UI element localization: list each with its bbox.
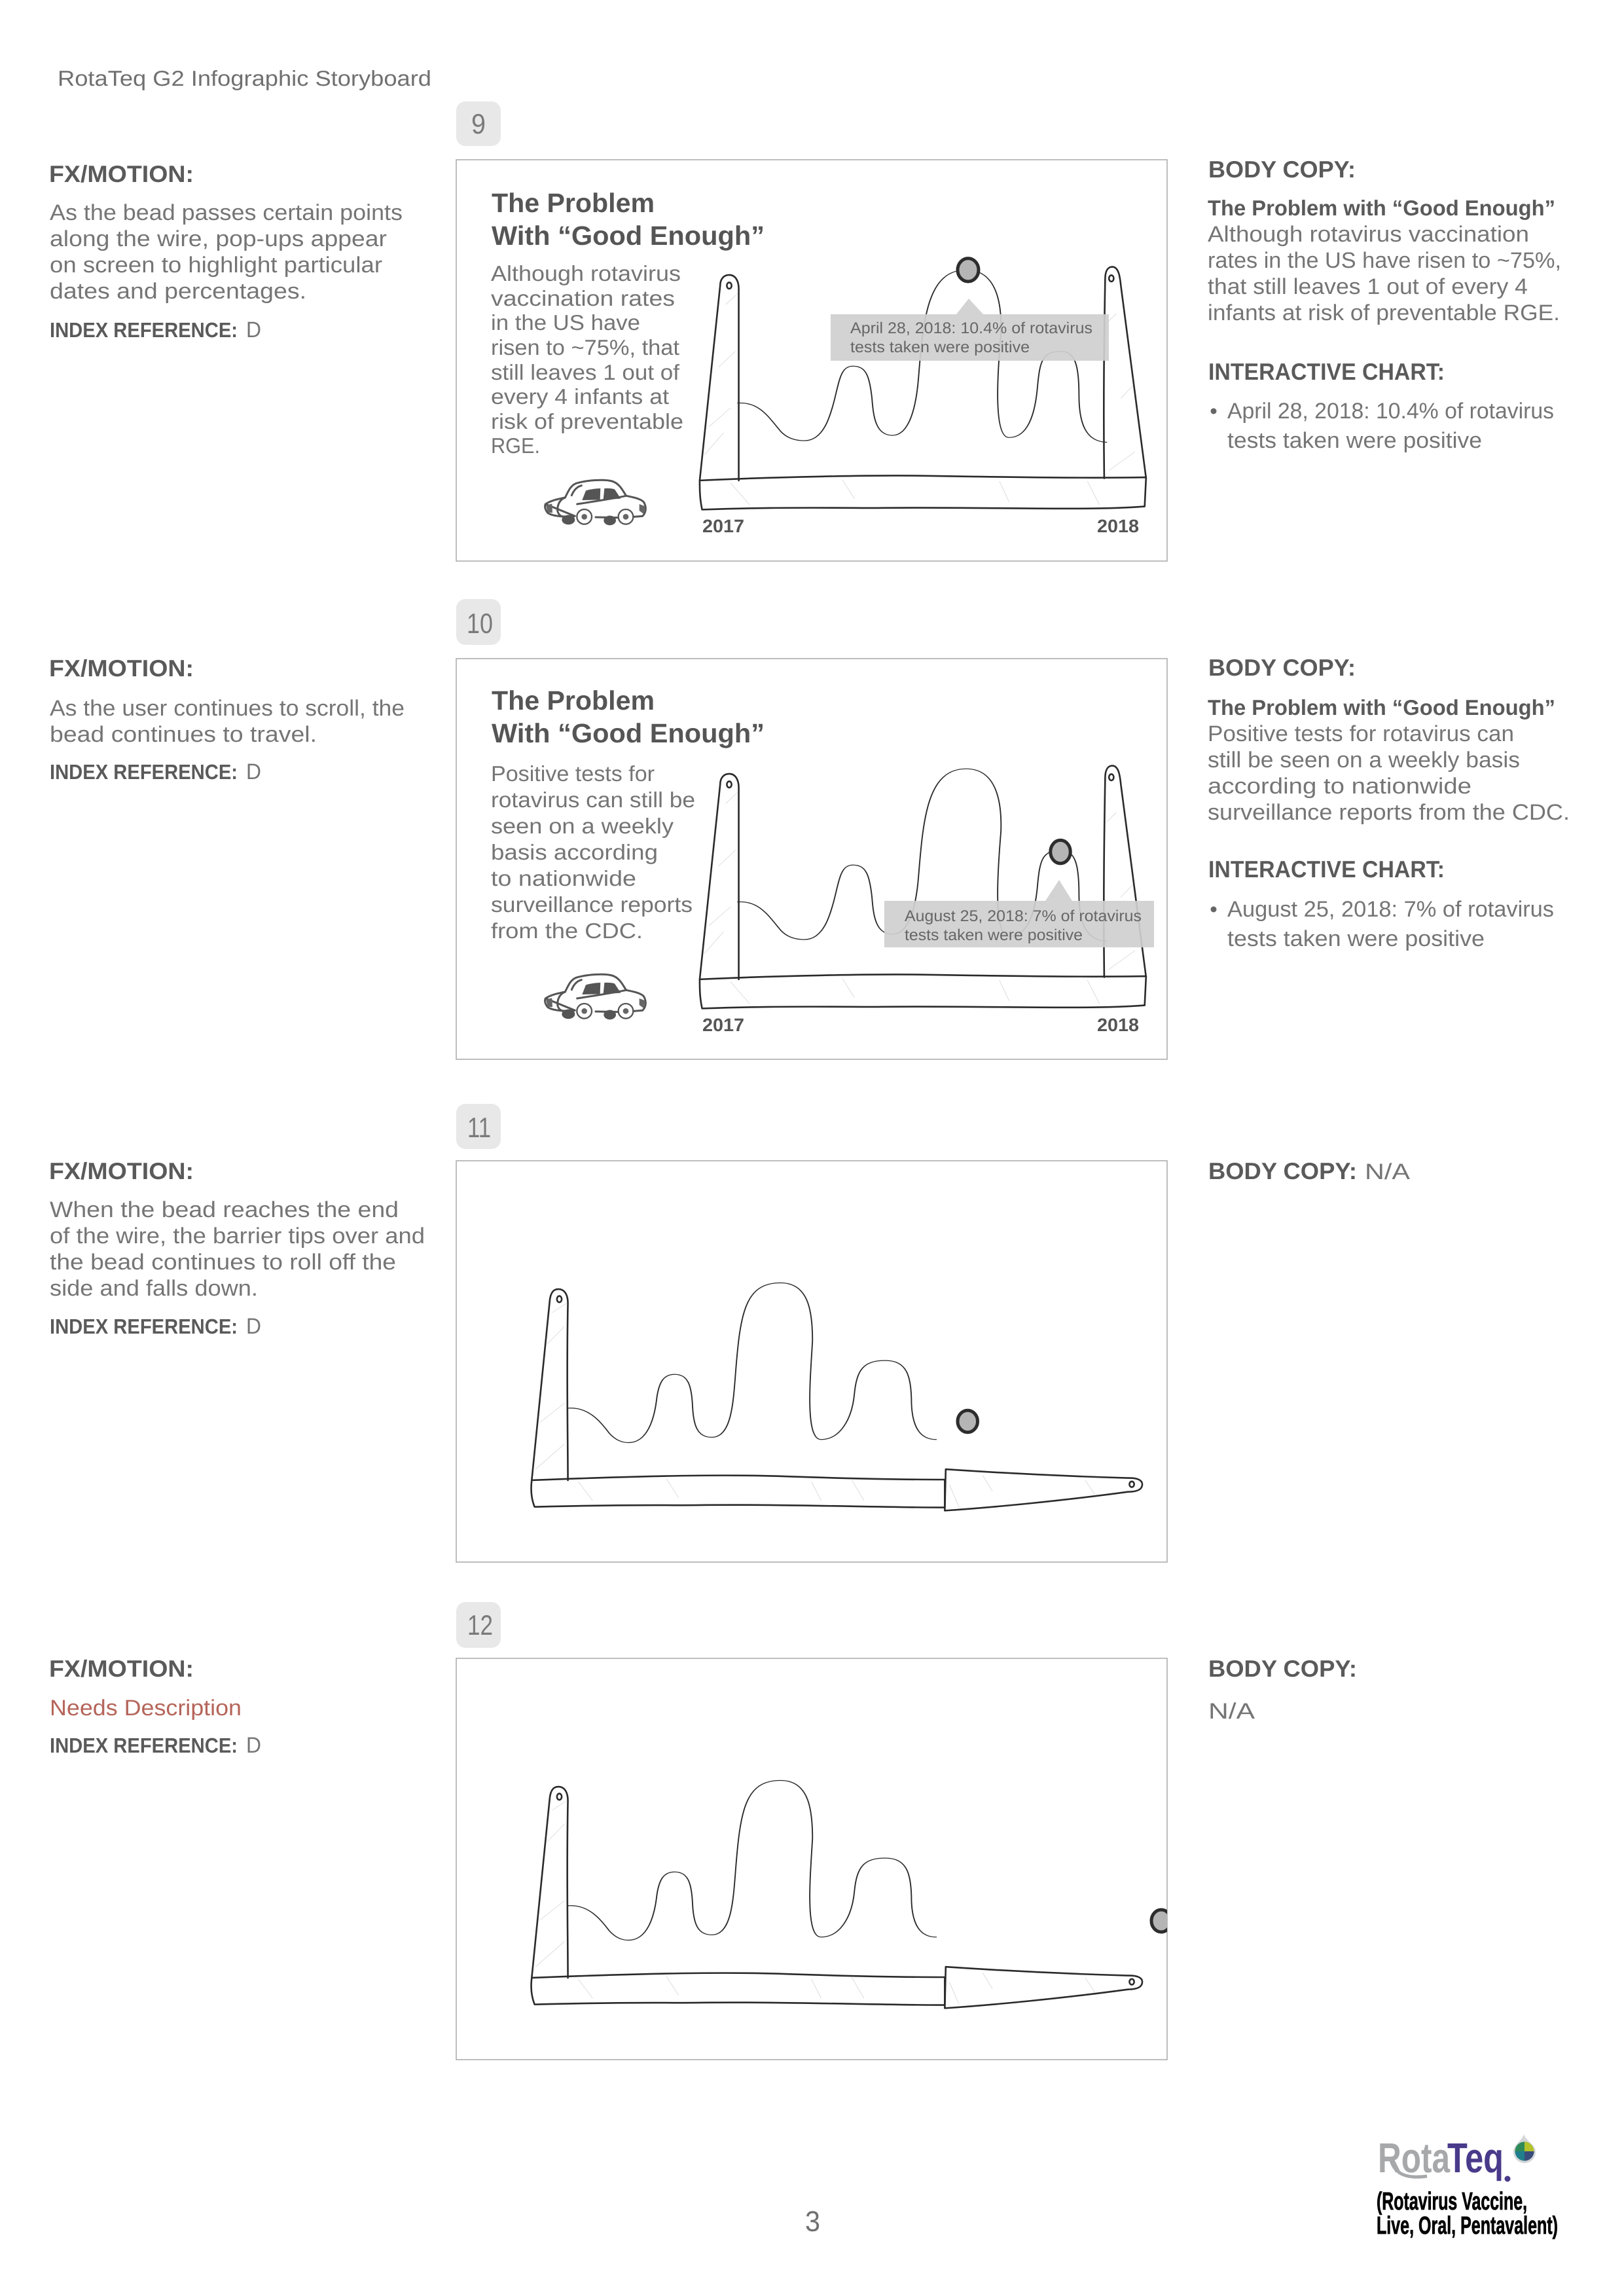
logo wordmark: Teq — [1447, 2134, 1504, 2181]
motion description 10 — [50, 696, 405, 747]
right notes 10 — [1208, 654, 1570, 951]
chart bullet 9: April 28, 2018: 10.4% of rotavirus — [1227, 399, 1554, 424]
panel body text 9: still leaves 1 out of — [491, 360, 680, 384]
panel body text 10: to nationwide — [491, 866, 636, 890]
barrier post, base and tipped barrier 11 — [532, 1289, 1142, 1510]
wire 10 — [738, 769, 1107, 941]
page number: 3 — [805, 2206, 820, 2238]
left notes 11 — [49, 1157, 425, 1339]
chart: bead on wire sketch 9 — [700, 259, 1146, 509]
pop-up callout 10 — [884, 880, 1154, 947]
body copy text 12: N/A — [1208, 1699, 1255, 1724]
chart bullet 10 — [1211, 897, 1554, 951]
motion description 12: Needs Description — [50, 1696, 242, 1721]
body copy text 10: The Problem with “Good Enough” — [1208, 695, 1555, 720]
icon: colored drop — [1513, 2134, 1536, 2163]
body copy text 10: Positive tests for rotavirus can — [1208, 721, 1514, 746]
heading: FX/MOTION 9: FX/MOTION: — [49, 160, 194, 187]
panel body text 9: every 4 infants at — [491, 384, 669, 409]
icon: car 9 — [545, 480, 645, 525]
motion description 11: the bead continues to roll off the — [50, 1250, 396, 1275]
body copy text 9 — [1208, 196, 1561, 325]
body copy text 10: still be seen on a weekly basis — [1208, 748, 1520, 773]
logo wordmark — [1378, 2134, 1511, 2181]
year label 2018: 2018 — [1097, 516, 1139, 536]
motion description 11: of the wire, the barrier tips over and — [50, 1224, 425, 1248]
logo: RotaTeq — [1377, 2134, 1558, 2240]
frame number tag 10 — [456, 599, 501, 645]
chart: tipped barrier sketch 11 — [532, 1283, 1142, 1510]
body copy text 9: The Problem with “Good Enough” — [1208, 196, 1555, 220]
right notes 11: N/A — [1365, 1159, 1410, 1184]
storyboard row 10 — [49, 599, 1570, 1059]
panel body text 9: risen to ~75%, that — [491, 335, 679, 359]
motion description 9 — [50, 200, 403, 304]
chart bullet 10: August 25, 2018: 7% of rotavirus — [1227, 897, 1554, 922]
panel body text 10: seen on a weekly — [491, 814, 674, 838]
bead 9 — [958, 259, 979, 282]
right notes 9 — [1208, 156, 1561, 453]
icon: car 10 — [545, 974, 645, 1019]
right notes 12 — [1208, 1655, 1357, 1724]
panel heading 9 — [492, 188, 765, 251]
index reference 9: D — [246, 318, 261, 342]
heading: interactive chart 9: INTERACTIVE CHART: — [1208, 358, 1445, 385]
bead 12 leaving frame — [1151, 1910, 1171, 1932]
heading: body copy 10: BODY COPY: — [1208, 654, 1356, 681]
panel heading 10: With “Good Enough” — [492, 718, 765, 748]
panel: frame 10 — [456, 659, 1167, 1059]
pop-up callout 9: April 28, 2018: 10.4% of rotavirus — [850, 319, 1092, 337]
pop-up callout 9 — [831, 299, 1109, 361]
heading: body copy 9: BODY COPY: — [1208, 156, 1356, 183]
chart: bead on wire sketch 10 — [700, 766, 1146, 1008]
frame number tag 9 — [456, 101, 501, 146]
right notes 11: BODY COPY: — [1208, 1157, 1357, 1184]
frame number tag 11: 11 — [467, 1112, 491, 1144]
motion description 9: As the bead passes certain points — [50, 200, 403, 225]
heading: FX/MOTION 12: FX/MOTION: — [49, 1655, 194, 1682]
index reference 9: INDEX REFERENCE: — [50, 318, 238, 342]
storyboard row 11 — [49, 1104, 1410, 1562]
panel body text 10: rotavirus can still be — [491, 788, 695, 812]
pop-up callout 10: tests taken were positive — [905, 926, 1083, 944]
logo descriptor text — [1377, 2188, 1558, 2240]
panel body text 9 — [491, 261, 683, 458]
chart: tipped barrier sketch 12 — [532, 1780, 1142, 2008]
motion description 10: As the user continues to scroll, the — [50, 696, 405, 721]
index reference 11: INDEX REFERENCE: — [50, 1315, 238, 1338]
left notes 9 — [49, 160, 403, 342]
logo descriptor text: (Rotavirus Vaccine, — [1377, 2188, 1527, 2215]
panel body text 9: Although rotavirus — [491, 261, 681, 285]
panel: frame 11 — [456, 1161, 1167, 1562]
year label 2017: 2017 — [702, 1015, 744, 1035]
frame number tag 10: 10 — [467, 608, 493, 640]
panel heading 9: The Problem — [492, 188, 655, 218]
barrier post, base and tipped barrier 12 — [532, 1787, 1142, 2008]
heading: FX/MOTION 11: FX/MOTION: — [49, 1157, 194, 1184]
body copy text 9: rates in the US have risen to ~75%, — [1208, 248, 1561, 273]
year label 2018: 2018 — [1097, 1015, 1139, 1035]
index reference 10: D — [246, 759, 261, 784]
frame number tag 12 — [456, 1602, 501, 1648]
wire 11 — [568, 1283, 936, 1443]
heading: interactive chart 10: INTERACTIVE CHART: — [1208, 856, 1445, 883]
panel body text 9: risk of preventable — [491, 409, 683, 433]
frame number tag 12: 12 — [467, 1610, 493, 1641]
motion description 10: bead continues to travel. — [50, 722, 317, 747]
panel body text 10: basis according — [491, 840, 658, 864]
left notes 10 — [49, 655, 405, 784]
panel body text 9: RGE. — [491, 433, 540, 458]
motion description 11: side and falls down. — [50, 1276, 258, 1301]
body copy text 10: according to nationwide — [1208, 774, 1471, 799]
left notes 12 — [49, 1655, 261, 1758]
bead 11 — [958, 1410, 978, 1432]
frame number tag 11 — [456, 1104, 501, 1149]
storyboard row 9 — [49, 101, 1561, 561]
body copy text 10: surveillance reports from the CDC. — [1208, 800, 1570, 825]
body copy text 9: infants at risk of preventable RGE. — [1208, 301, 1560, 325]
panel body text 10: from the CDC. — [491, 919, 643, 943]
barrier posts and base 9 — [700, 267, 1146, 509]
panel: frame 9 — [456, 160, 1167, 561]
page header title: RotaTeq G2 Infographic Storyboard — [58, 66, 431, 90]
chart bullet 10: tests taken were positive — [1227, 926, 1485, 951]
motion description 11: When the bead reaches the end — [50, 1197, 399, 1222]
chart bullet 9 — [1211, 399, 1554, 453]
barrier posts and base 10 — [700, 766, 1146, 1008]
panel body text 9: in the US have — [491, 310, 640, 335]
panel heading 10: The Problem — [492, 685, 655, 716]
frame number tag 9: 9 — [471, 109, 486, 140]
panel heading 9: With “Good Enough” — [492, 221, 765, 251]
index reference 12: D — [246, 1733, 261, 1758]
wire 12 — [568, 1780, 936, 1941]
index reference 10: INDEX REFERENCE: — [50, 760, 238, 784]
panel body text 9: vaccination rates — [491, 286, 675, 310]
index reference 12: INDEX REFERENCE: — [50, 1734, 238, 1757]
panel body text 10 — [491, 761, 695, 943]
heading: FX/MOTION 10: FX/MOTION: — [49, 655, 194, 682]
logo wordmark: Rota — [1378, 2134, 1450, 2181]
motion description 9: dates and percentages. — [50, 279, 306, 304]
motion description 9: along the wire, pop-ups appear — [50, 227, 387, 251]
chart bullet 9: tests taken were positive — [1227, 428, 1482, 453]
index reference 11: D — [246, 1314, 261, 1339]
body copy text 10 — [1208, 695, 1570, 825]
motion description 11 — [50, 1197, 425, 1301]
motion description 9: on screen to highlight particular — [50, 253, 382, 278]
bead 10 — [1051, 840, 1070, 864]
panel: frame 12 — [456, 1658, 1171, 2060]
pop-up callout 9: tests taken were positive — [850, 338, 1030, 356]
storyboard row 12 — [49, 1602, 1357, 2060]
year label 2017: 2017 — [702, 516, 744, 536]
panel body text 10: surveillance reports — [491, 892, 693, 917]
heading: body copy 12: BODY COPY: — [1208, 1655, 1357, 1682]
panel heading 10 — [492, 685, 765, 748]
body copy text 9: Although rotavirus vaccination — [1208, 222, 1529, 247]
pop-up callout 10: August 25, 2018: 7% of rotavirus — [905, 907, 1142, 925]
wire 9 — [738, 270, 1107, 442]
panel body text 10: Positive tests for — [491, 761, 655, 786]
body copy text 9: that still leaves 1 out of every 4 — [1208, 274, 1528, 299]
